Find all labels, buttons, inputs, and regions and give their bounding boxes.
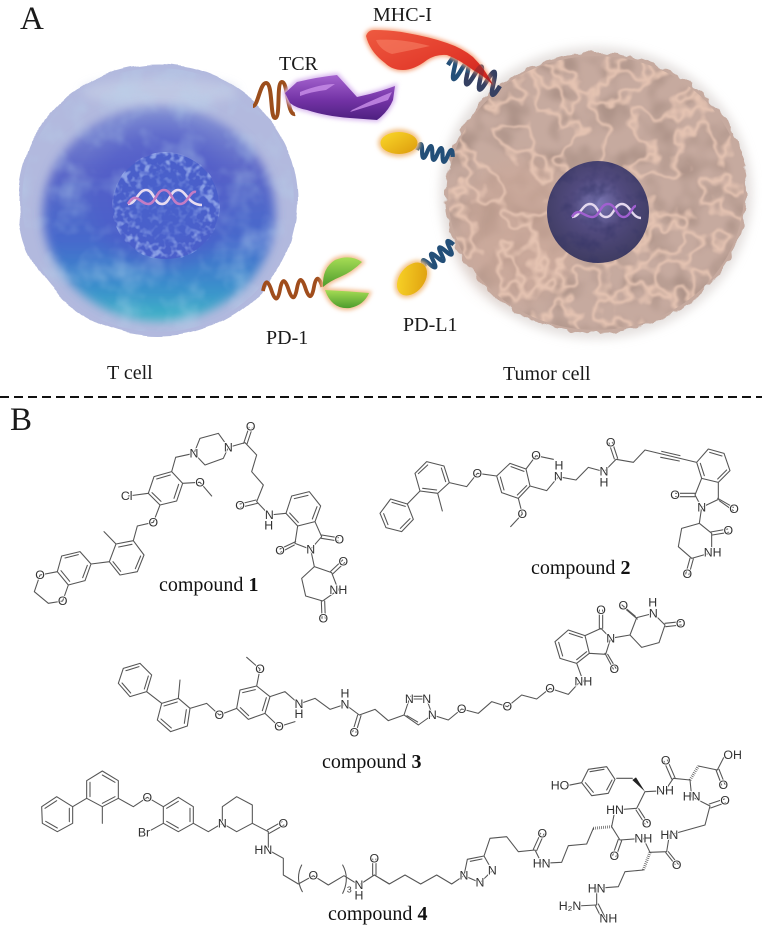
compound 3 structure: O [274,720,284,734]
compound 3 structure: O [545,681,555,695]
compound 3 structure: N [295,697,303,711]
compound 3 structure [118,595,685,739]
compound 3 structure: O [676,616,685,630]
compound 4 structure: HN [533,856,551,870]
T cell label: T cell [107,362,153,384]
T cell [18,64,298,336]
compound 1 structure: O [149,515,158,529]
compound 3 structure: O [215,708,224,722]
compound 4 structure: H₂N [559,899,581,913]
compound 2 structure: N [554,470,563,484]
compound 1 structure: O [275,544,285,558]
compound 1 structure: Cl [121,489,132,503]
compound 2 structure: O [606,435,615,449]
compound 4 structure: O [672,858,681,872]
compound 3 structure: N [341,697,349,711]
compound 4 structure: O [642,816,651,830]
compound 4 label: compound 4 [328,903,427,925]
compound 3 structure: O [596,603,606,617]
compound 4 structure: O [538,826,547,840]
PD-L1 label: PD-L1 [403,314,457,336]
compound 1 structure: O [335,532,344,546]
compound 1 structure: N [224,440,233,454]
compound 1 structure: H [264,519,273,533]
compound 4 structure: Br [138,826,150,840]
compound 2 structure [380,435,739,581]
compound 2 structure: O [473,466,482,480]
compound 1 structure: O [58,594,67,608]
compound 4 structure: O [309,869,318,883]
compound 3 structure: O [610,662,619,676]
compound 4 structure: N [488,864,497,878]
panel label A: A [20,1,44,37]
compound 3 structure: N [649,606,658,620]
compound 4 structure: 3 [347,885,352,895]
compound 4 structure: NH [656,784,674,798]
TCR label: TCR [279,53,319,75]
compound 2 structure: NH [704,546,722,560]
tumor cell [440,47,752,339]
compound 4 structure: O [143,790,152,804]
compound 1 structure: O [246,420,255,434]
compound 2 structure: H [600,476,608,490]
compound 4 structure: O [661,754,670,768]
compound 1 label: compound 1 [159,574,258,596]
compound 1 structure: O [339,555,348,569]
compound 3 structure: O [255,662,265,676]
compound 2 structure: O [724,524,733,538]
compound 1 structure: O [35,568,45,582]
compound 2 structure: O [670,488,680,502]
compound 1 structure: N [265,508,274,522]
compound 2 structure: O [518,507,527,521]
tumor DNA helix [572,204,641,218]
MHC-I label: MHC-I [373,4,432,26]
PD-L1 ligand upper [378,129,454,163]
compound 2 structure: O [729,502,739,516]
compound 3 structure: N [422,692,431,706]
compound 1 structure: O [195,475,205,489]
compound 4 structure: O [719,778,728,792]
PD-1 receptor [262,257,369,308]
compound 4 structure: O [610,849,619,863]
TCR receptor [253,75,395,120]
compound 4 structure: H [355,889,363,903]
compound 4 structure: N [476,876,484,890]
compound 2 structure: O [683,567,692,581]
compound 4 structure: NH [634,831,652,845]
tumor cell nucleus [547,161,649,263]
compound 4 structure: O [720,794,730,808]
compound 3 structure: N [428,708,437,722]
Tumor cell label: Tumor cell [503,363,591,385]
compound 4 structure: HN [660,828,678,842]
compound 3 structure: N [405,692,414,706]
compound 4 structure: N [218,816,227,830]
compound 1 structure: N [306,542,315,556]
compound 3 structure: NH [574,675,592,689]
compound 3 structure: O [503,700,512,714]
compound 3 structure: O [619,599,628,613]
compound 2 structure: O [531,449,541,463]
compound 2 structure: H [555,459,563,473]
compound 3 label: compound 3 [322,751,421,773]
compound 4 structure: O [279,816,288,830]
compound 4 structure: N [460,869,468,883]
compound 4 structure: HN [254,843,272,857]
compound 4 structure: O [370,851,379,865]
compound 2 structure: N [697,500,706,514]
compound 4 structure: HN [606,803,624,817]
compound 4 structure: OH [723,748,742,762]
compound 3 structure: H [648,595,657,609]
T cell DNA helix [128,190,202,205]
compound 3 structure: O [350,725,359,739]
compound 1 structure: N [190,446,198,460]
compound 4 structure [42,748,742,926]
T cell nucleus [112,152,220,260]
compound 2 label: compound 2 [531,557,630,579]
PD-L1 ligand lower [387,239,458,305]
compound 4 structure: NH [599,912,617,926]
compound 1 structure: O [235,499,245,513]
compound 3 structure: N [606,631,615,645]
compound 4 structure: N [355,878,363,892]
compound 1 structure [34,420,348,625]
PD-1 label: PD-1 [266,327,308,349]
compound 4 structure: HN [683,790,701,804]
compound 1 structure: NH [329,583,347,597]
compound 3 structure: H [295,707,303,721]
panel label B: B [10,402,32,438]
compound 2 structure: N [600,465,608,479]
MHC-I molecule [366,30,504,96]
compound 3 structure: H [341,686,349,700]
compound 1 structure: O [319,611,328,625]
compound 4 structure: HN [588,881,606,895]
compound 4 structure: HO [551,779,569,793]
compound 3 structure: O [457,702,466,716]
